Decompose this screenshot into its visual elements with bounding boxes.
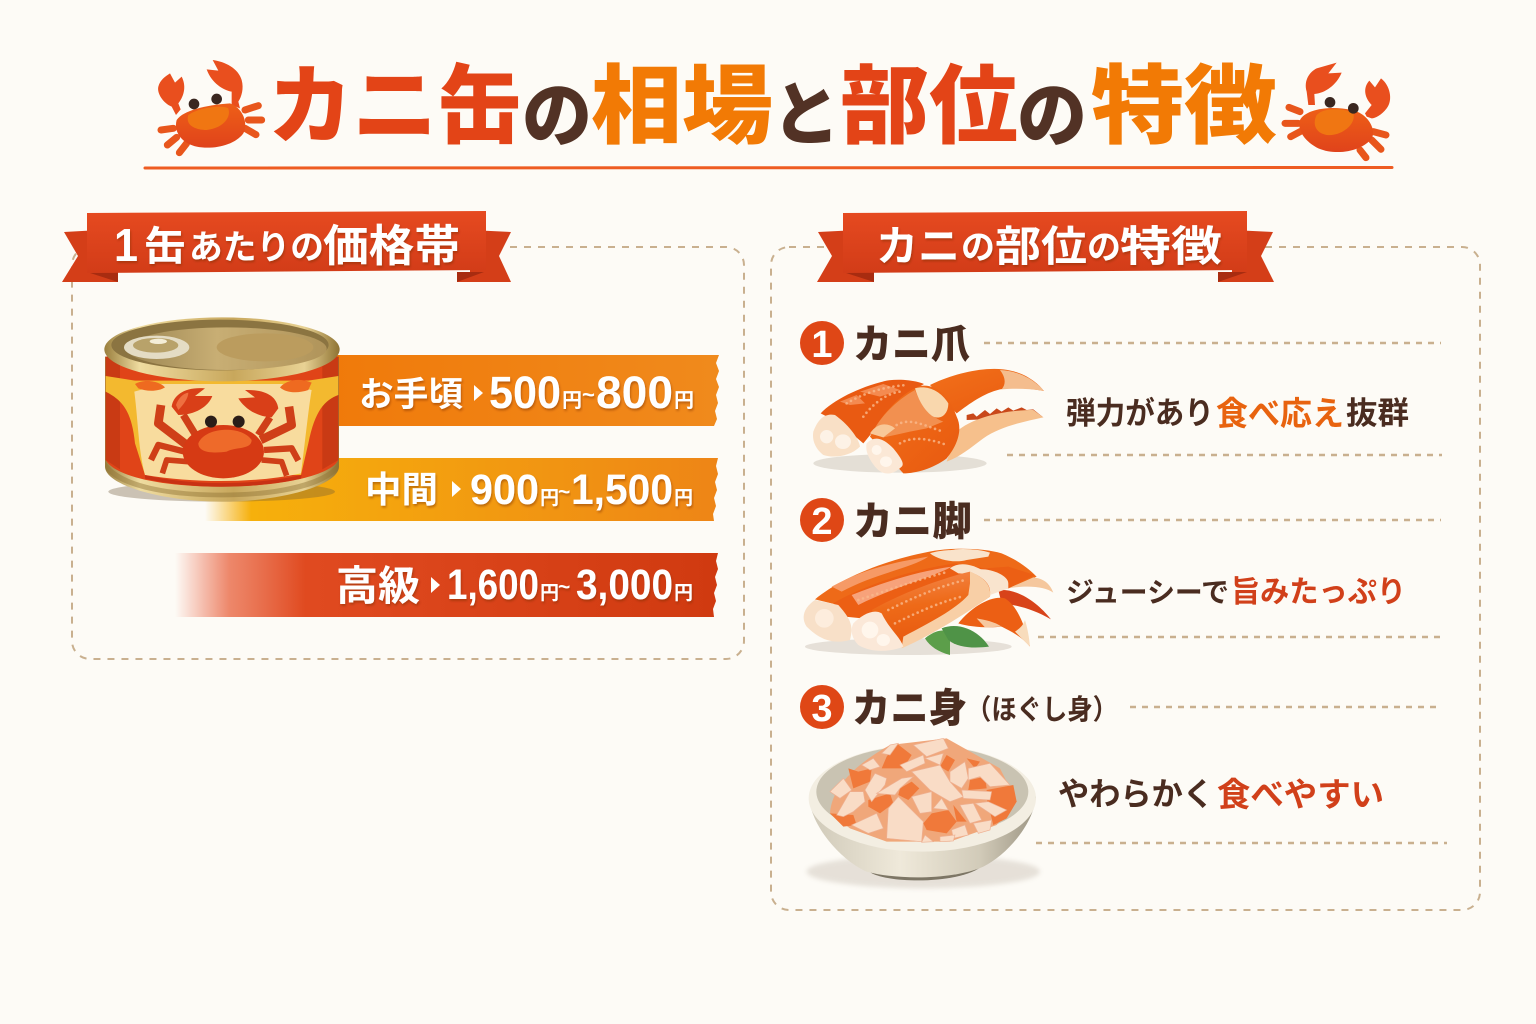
price bar: affordable: お手頃 [359,367,463,416]
description: leg: ジューシーで [1066,571,1229,611]
title [158,36,1390,162]
description: leg: 旨みたっぷり [1231,567,1406,611]
number badge 2 [800,498,844,543]
illustration: crab claw [813,369,1044,474]
description: claw: 抜群 [1346,388,1409,433]
price bar: premium: 1,600 [447,561,539,609]
title text: 相場: 相場 [591,36,773,161]
illustration: bowl of crab meat [807,738,1040,888]
subheading: ほぐし身: （ほぐし身） [966,688,1118,728]
icon: right crab [1285,63,1390,158]
price bar: mid: 900 [470,466,539,514]
part 3: flaked meat [800,676,1447,888]
description: flaked meat: やわらかく [1058,769,1214,815]
ribbon heading: price per can: 価格帯 [323,210,460,274]
description: leg [1066,567,1406,611]
panel: crab parts [771,211,1480,910]
heading: カニ身: カニ身 [852,676,967,734]
title text: の: の [522,57,592,162]
price bar: affordable: 円 [562,384,582,413]
price bar: affordable: 800 [596,367,673,418]
ribbon heading: crab parts: の [961,220,995,269]
price bar: premium: 円 [540,578,559,605]
price bar: premium: 円 [674,578,693,605]
price bar: premium: ~ [558,576,570,599]
ribbon heading: crab parts: 部位 [995,213,1087,274]
title text: カニ缶: カニ缶 [268,36,522,161]
description: flaked meat: 食べやすい [1217,768,1384,816]
title text: 部位: 部位 [840,36,1018,161]
description: claw: 食べ応え [1216,387,1344,435]
panel: price ranges [62,210,744,659]
description: claw: 弾力があり [1066,388,1214,433]
part 1: claw [800,312,1442,474]
price bar: mid: 1,500 [571,466,673,514]
price bar: affordable: ~ [582,382,595,407]
ribbon heading: price per can: 缶 [144,214,186,272]
price bar: mid: ~ [558,481,570,504]
description: flaked meat [1058,768,1384,816]
illustration: crab legs [804,549,1053,655]
icon: left crab [158,60,262,153]
price bar: affordable [330,355,719,426]
ribbon heading: crab parts: カニ [876,213,960,274]
price bar: affordable: 500 [489,367,561,418]
price bar: premium: 高級 [336,552,420,612]
number badge 1: 1 [811,324,833,366]
title text: 特徴: 特徴 [1091,36,1277,161]
part 2: leg [800,489,1442,655]
can crab [151,388,298,478]
heading: カニ爪: カニ爪 [853,312,970,370]
heading: カニ脚: カニ脚 [853,489,972,547]
ribbon heading: price per can: あたりの [189,220,324,269]
number badge 2: 2 [811,501,833,543]
price bar: mid: 中間 [365,461,438,513]
price bar: affordable: 円 [674,384,694,413]
number badge 3 [800,685,844,730]
ribbon heading: price per can [62,210,511,282]
description: claw [1066,387,1409,435]
ribbon heading: price per can: 1 [114,219,138,271]
icon: crab can [104,317,340,502]
price bar: mid: 円 [674,483,693,510]
title text: と: と [772,59,840,160]
price bar: mid: 円 [540,483,559,510]
number badge 3: 3 [811,688,833,730]
price bar: premium [175,552,718,617]
ribbon heading: crab parts: の [1087,220,1121,269]
price bar: premium: 3,000 [576,561,673,609]
price bar: mid [205,458,718,521]
ribbon heading: crab parts: 特徴 [1120,213,1222,274]
title text: の: の [1017,57,1087,162]
number badge 1 [800,321,844,366]
ribbon heading: crab parts [817,211,1274,282]
